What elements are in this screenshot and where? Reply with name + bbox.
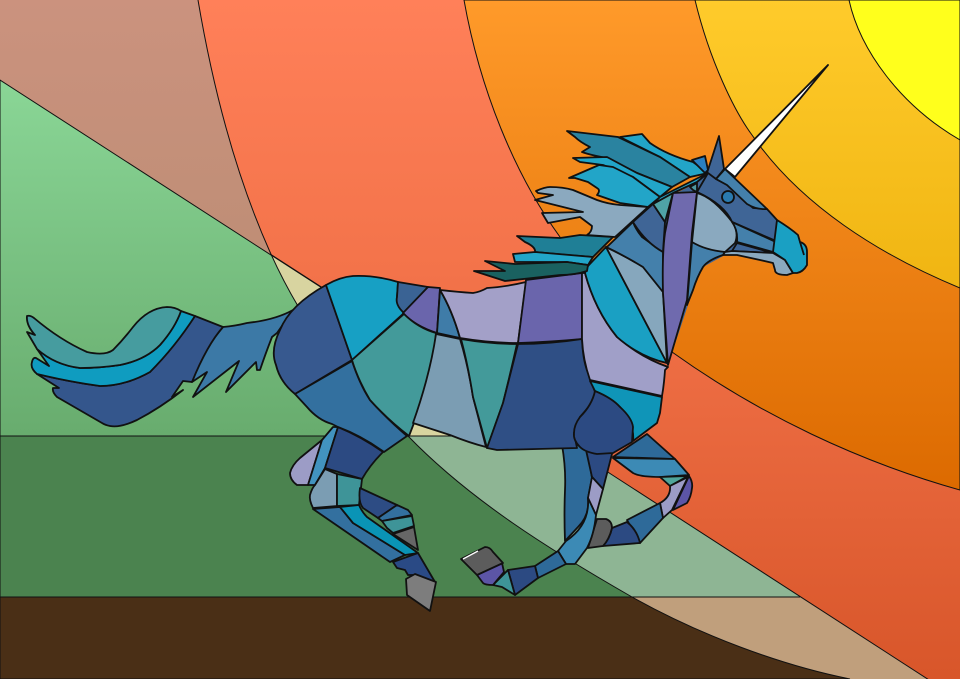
yellow sun <box>849 0 960 140</box>
unicorn <box>27 65 828 611</box>
shin segment <box>535 551 566 578</box>
mane small teal <box>690 183 697 192</box>
purple back <box>518 273 582 343</box>
pale green wedge <box>410 436 807 602</box>
ear <box>707 136 724 179</box>
rear hoof <box>406 574 436 611</box>
rear inner gray <box>393 527 418 550</box>
front neck <box>687 242 725 305</box>
lower front blue <box>558 498 596 564</box>
diagonal edge over red band <box>608 472 928 679</box>
pastern teal <box>493 570 515 595</box>
mane <box>474 131 708 281</box>
right-side band clipped to the large arc <box>198 0 960 679</box>
rear inner dark <box>359 488 397 518</box>
mane cyan low <box>513 252 593 265</box>
pastern dark <box>508 566 538 595</box>
gray neck wedge <box>606 247 667 363</box>
red band over wedge right part <box>608 436 960 679</box>
raised leg lavender <box>660 477 688 518</box>
horn <box>725 65 828 177</box>
teal hip <box>352 314 436 436</box>
cheek <box>692 193 737 252</box>
rear fetlock <box>393 553 435 582</box>
front leg dark <box>586 450 613 489</box>
front leg lavender <box>588 477 603 515</box>
jaw <box>723 251 793 275</box>
cyan rump <box>326 276 404 360</box>
mane strand cyan middle <box>573 157 672 197</box>
forehead strip <box>716 169 767 209</box>
mane strand cyan lower <box>569 165 660 207</box>
rear gray knee <box>310 469 337 508</box>
front legs <box>461 434 692 595</box>
rear long blue shin <box>313 507 405 562</box>
nostril <box>800 242 804 255</box>
lavender back <box>440 282 526 343</box>
blue hip <box>295 361 407 452</box>
mane dark teal <box>517 235 613 257</box>
mane strand gray <box>535 187 648 237</box>
raised leg teal <box>660 476 688 486</box>
raised leg dark <box>603 522 640 546</box>
orange arc <box>464 0 960 490</box>
dark top flank <box>397 282 428 313</box>
tail cyan band <box>32 311 195 386</box>
rear thigh dark <box>325 427 383 479</box>
nose dark <box>732 243 773 253</box>
tail dark band <box>37 316 223 426</box>
blue neck <box>606 222 663 292</box>
mane strand teal <box>567 131 690 187</box>
hoof highlight <box>463 551 478 559</box>
small purple flank <box>403 287 440 333</box>
mane thin strip <box>653 173 708 204</box>
nose strip <box>732 222 776 252</box>
gray flank <box>413 334 486 447</box>
horizon lines <box>410 436 800 598</box>
shoulder <box>574 391 633 454</box>
rear inner blue <box>378 505 412 521</box>
teal neck <box>653 193 673 222</box>
neck <box>585 173 777 365</box>
rear inner teal <box>382 516 414 533</box>
rear teal knee <box>337 474 362 506</box>
cyan neck <box>585 247 667 363</box>
lavender chest <box>582 273 668 396</box>
raised hoof <box>588 519 612 548</box>
raised leg blue <box>613 458 689 477</box>
mane strand cyan top <box>620 134 708 177</box>
neck and head underlay <box>588 173 777 365</box>
tan wedge <box>632 597 930 679</box>
teal flank <box>461 339 517 448</box>
front leg upper blue <box>562 445 592 541</box>
diagonal band edge <box>272 254 322 287</box>
cyan chest <box>590 381 662 441</box>
dark rump <box>274 285 352 394</box>
yellow-orange arc <box>695 0 960 288</box>
dark neck <box>633 204 665 252</box>
tail teal strand <box>27 307 181 368</box>
muzzle <box>773 220 807 273</box>
raised leg shin <box>627 503 663 543</box>
body <box>274 273 668 454</box>
tail <box>27 307 293 426</box>
rear lavender hock <box>290 440 322 485</box>
mane darkest <box>474 261 588 281</box>
rear legs <box>290 427 436 611</box>
rear cyan shin <box>340 505 418 555</box>
orange-red arc band <box>198 0 560 292</box>
dark belly <box>487 339 595 450</box>
pale yellow wedge <box>272 256 808 602</box>
tuft <box>692 156 708 173</box>
eye <box>722 191 734 203</box>
brown ground <box>0 597 960 679</box>
purple band <box>663 192 697 365</box>
head dark <box>697 173 777 241</box>
tail blue tip <box>192 310 293 397</box>
raised leg purple <box>673 476 692 510</box>
large arc outline <box>198 0 850 679</box>
raised leg top <box>613 434 675 459</box>
head <box>692 65 828 275</box>
hoof purple <box>477 563 504 585</box>
hoof gray <box>461 547 503 575</box>
small blue flank <box>437 290 460 338</box>
rear blue strip <box>308 427 338 485</box>
dark green field <box>0 436 960 597</box>
